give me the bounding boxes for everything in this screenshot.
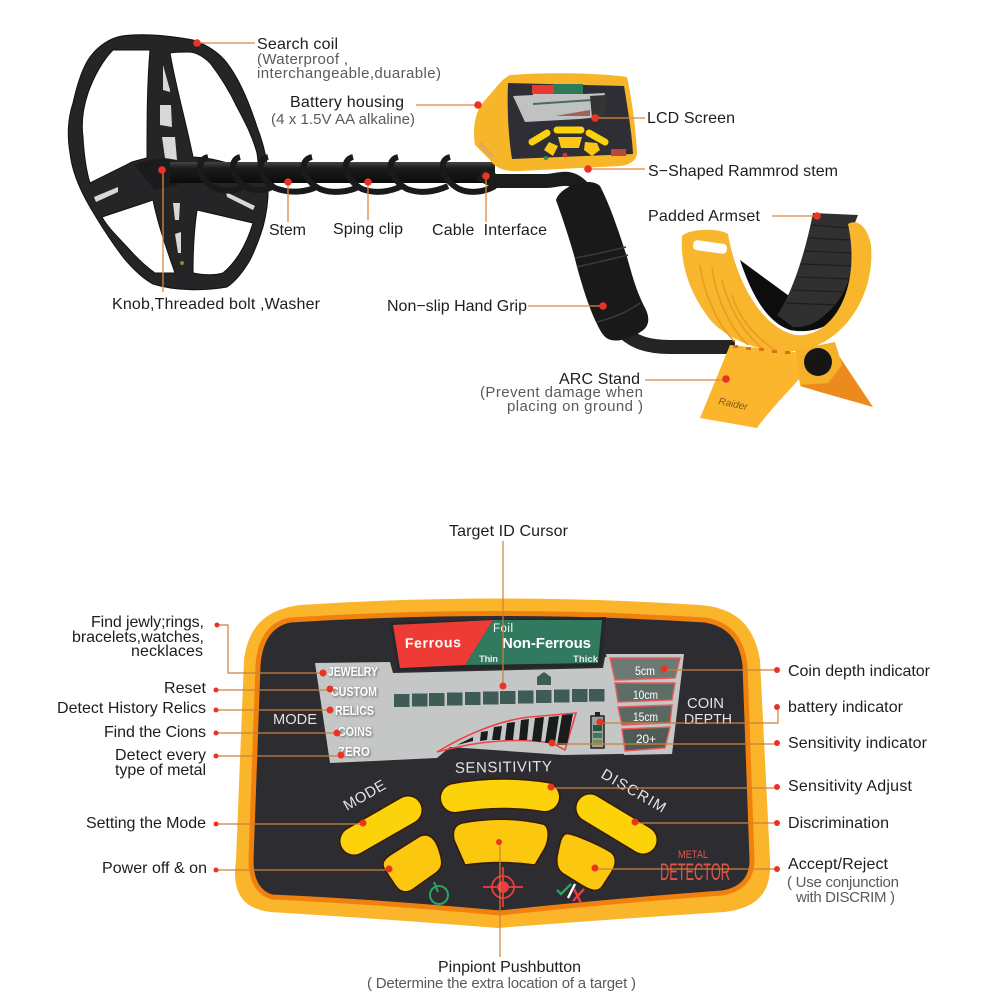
callout: Find jewelry: bracelets,watches, [72,629,204,646]
battery icon [591,712,604,748]
callout: Battery housing: Battery housing [290,94,404,111]
ferrous scale: Foil [493,623,513,635]
callout: Search coil: interchangeable,duarable) [257,65,441,82]
callout: Target ID Cursor: Target ID Cursor [449,523,569,540]
callout: Coin depth indicator: Coin depth indicator [788,663,931,680]
callout: ARC Stand [480,371,730,415]
callout: Find the Coins: Find the Cions [104,724,206,741]
icon: target [483,867,523,907]
panel captions: DISCRIM [598,766,669,816]
callout: Discrimination: Discrimination [788,815,889,832]
callout: S-Shaped Rammrod stem: S−Shaped Rammrod stem [648,163,838,180]
stem tube [170,162,495,183]
metal detector product photo [68,35,873,428]
coin depth boxes: 5cm [635,664,655,678]
metal detector logo: DETECTOR [660,859,730,886]
callout: Knob, Threaded bolt, Washer [112,166,321,313]
arc stand [700,342,873,428]
callout: Pinpoint Pushbutton: ( Determine the extra location of a target ) [367,975,636,992]
callout: Accept/Reject: Accept/Reject [788,856,889,873]
metal detector logo: METAL [678,849,708,861]
panel captions [273,695,732,816]
pivot knob [804,348,832,376]
panel captions: MODE [340,777,389,814]
callout: Detect every type of metal: type of metal [115,762,206,779]
callout: ARC Stand: ARC Stand [559,371,640,388]
panel body [235,598,770,928]
pinpoint button [453,819,548,865]
callout: Power off and on: Power off & on [102,860,207,877]
callout: Find jewelry [72,614,326,676]
callout: Knob, Threaded bolt, Washer: Knob,Threaded bolt ,Washer [112,296,321,313]
callout: LCD Screen: LCD Screen [647,110,735,127]
callout: Pinpoint Pushbutton: Pinpiont Pushbutton [438,959,581,976]
callout: Find the Coins [104,724,340,741]
panel: control box close-up [235,598,770,928]
hand grip [556,182,648,341]
callout: Sensitivity indicator [548,735,928,752]
ferrous scale: Thick [573,654,599,665]
lcd mode names: JEWELRY [328,664,378,679]
search coil [68,35,268,290]
callout: Accept/Reject [592,856,899,906]
control box [474,73,637,171]
callout: Reset: Reset [164,680,207,697]
callout: Find jewelry: Find jewly;rings, [91,614,204,631]
coin depth boxes: 10cm [633,688,658,702]
callout: Detect History Relics [57,700,334,717]
lcd mode names [328,664,378,759]
callout: Cable Interface [432,172,547,239]
panel captions: SENSITIVITY [455,758,552,777]
buttons [354,794,643,892]
callout: Setting the Mode [86,815,366,832]
callout: Find jewelry: necklaces [131,643,203,660]
callout: ARC Stand: (Prevent damage when [480,384,643,401]
icon: power [430,882,448,904]
target id cells [394,672,604,707]
power button [383,835,442,892]
lcd mode names: ZERO [338,744,370,759]
sensitivity meter [437,713,576,752]
callout: Setting the Mode: Setting the Mode [86,815,206,832]
callout: Padded Armset [648,208,821,225]
callout: Search coil: Search coil [257,36,338,53]
callout: Stem [269,178,306,239]
callout: Target ID Cursor [449,523,569,690]
callout: Power off and on [102,860,392,877]
callout: Sensitivity Adjust [548,778,913,795]
armset [682,213,871,351]
ferrous scale: Thin [479,654,498,665]
panel captions: COIN [687,695,724,712]
coin depth boxes: 15cm [633,710,658,724]
callout: Coin depth indicator [660,663,931,680]
callout: Detect History Relics: Detect History Relics [57,700,206,717]
coin depth boxes [606,654,684,755]
ferrous scale: Non-Ferrous [502,635,591,652]
callout: Non-slip Hand Grip: Non−slip Hand Grip [387,298,527,315]
lcd mode names: CUSTOM [331,684,377,699]
callout: Battery housing [271,94,482,128]
accept button [557,834,615,890]
ferrous scale: Ferrous [405,634,461,651]
callout: Padded Armset: Padded Armset [648,208,761,225]
callout: Stem: Stem [269,222,306,239]
lower stem [620,328,735,347]
lcd mode names: COINS [338,724,372,739]
panel dark face [251,614,752,913]
callout: Cable Interface: Cable Interface [432,222,547,239]
ferrous scale [390,617,606,671]
callout: Search coil [193,36,441,82]
callout: Accept/Reject: with DISCRIM ) [795,889,895,906]
stand logo: Raider [717,396,749,413]
callout: Search coil: (Waterproof , [257,51,348,68]
panel captions: MODE [273,711,317,728]
S-shaped stem [480,174,585,190]
callout: Detect every type of metal: Detect every [115,747,206,764]
spring clips [200,157,495,192]
callout: Non-slip Hand Grip [387,298,607,315]
callout: Sensitivity indicator: Sensitivity indicator [788,735,928,752]
callout: Detect every type of metal [115,747,344,779]
callout: ARC Stand: placing on ground ) [507,398,643,415]
coin depth boxes: 20+ [636,732,656,746]
callout: LCD Screen [591,110,735,127]
panel captions: DEPTH [684,711,732,728]
callout: Sensitivity Adjust: Sensitivity Adjust [788,778,913,795]
callout: Discrimination [632,815,889,832]
callout: battery indicator [596,699,904,726]
callout: Accept/Reject: ( Use conjunction [787,874,899,891]
callout: Battery housing: (4 x 1.5V AA alkaline) [271,111,415,128]
lcd background [315,655,683,763]
callout: battery indicator: battery indicator [788,699,904,716]
callout: Sping clip: Sping clip [333,221,403,238]
icon: check and cross [557,884,584,903]
callout: Pinpoint Pushbutton [367,839,636,992]
lcd mode names: RELICS [335,703,374,718]
callout: Sping clip [333,178,403,238]
metal detector logo [660,849,730,886]
callout: Reset [164,680,334,697]
